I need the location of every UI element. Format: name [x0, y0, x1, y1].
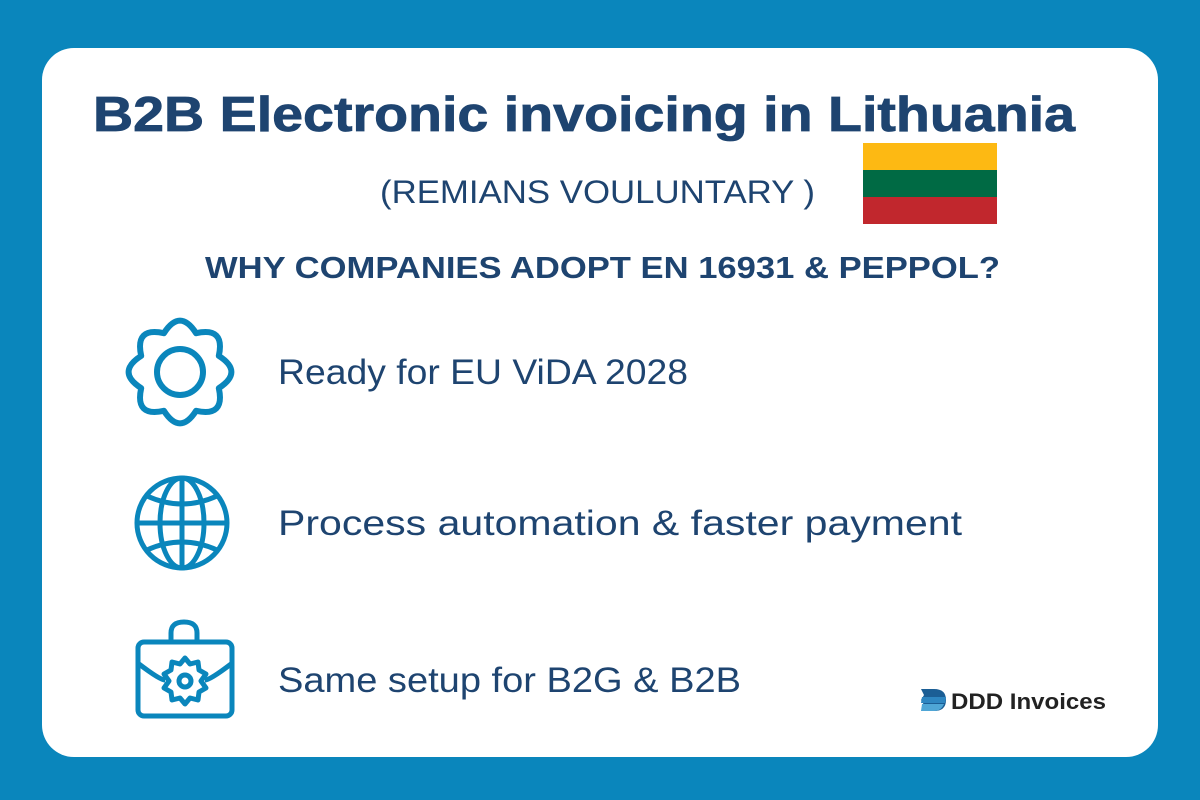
- item text: Ready for EU ViDA 2028: Ready for EU ViDA 2028: [278, 353, 688, 392]
- icon: Lithuanian flag: [863, 143, 997, 224]
- heading: WHY COMPANIES ADOPT EN 16931 & PEPPOL?: [205, 250, 1000, 285]
- icon: briefcase with gear: [138, 622, 232, 716]
- title: B2B Electronic invoicing in Lithuania: [93, 88, 1076, 142]
- logo: DDD Invoices: DDD Invoices: [951, 689, 1106, 714]
- icon: globe: [137, 478, 227, 568]
- icon: gear: [129, 321, 231, 423]
- item text: Same setup: Same setup for B2G & B2B: [278, 661, 741, 700]
- item text: Process automation: Process automation & faster payment: [278, 504, 962, 543]
- subtitle: (REMIANS VOULUNTARY ): [380, 174, 815, 210]
